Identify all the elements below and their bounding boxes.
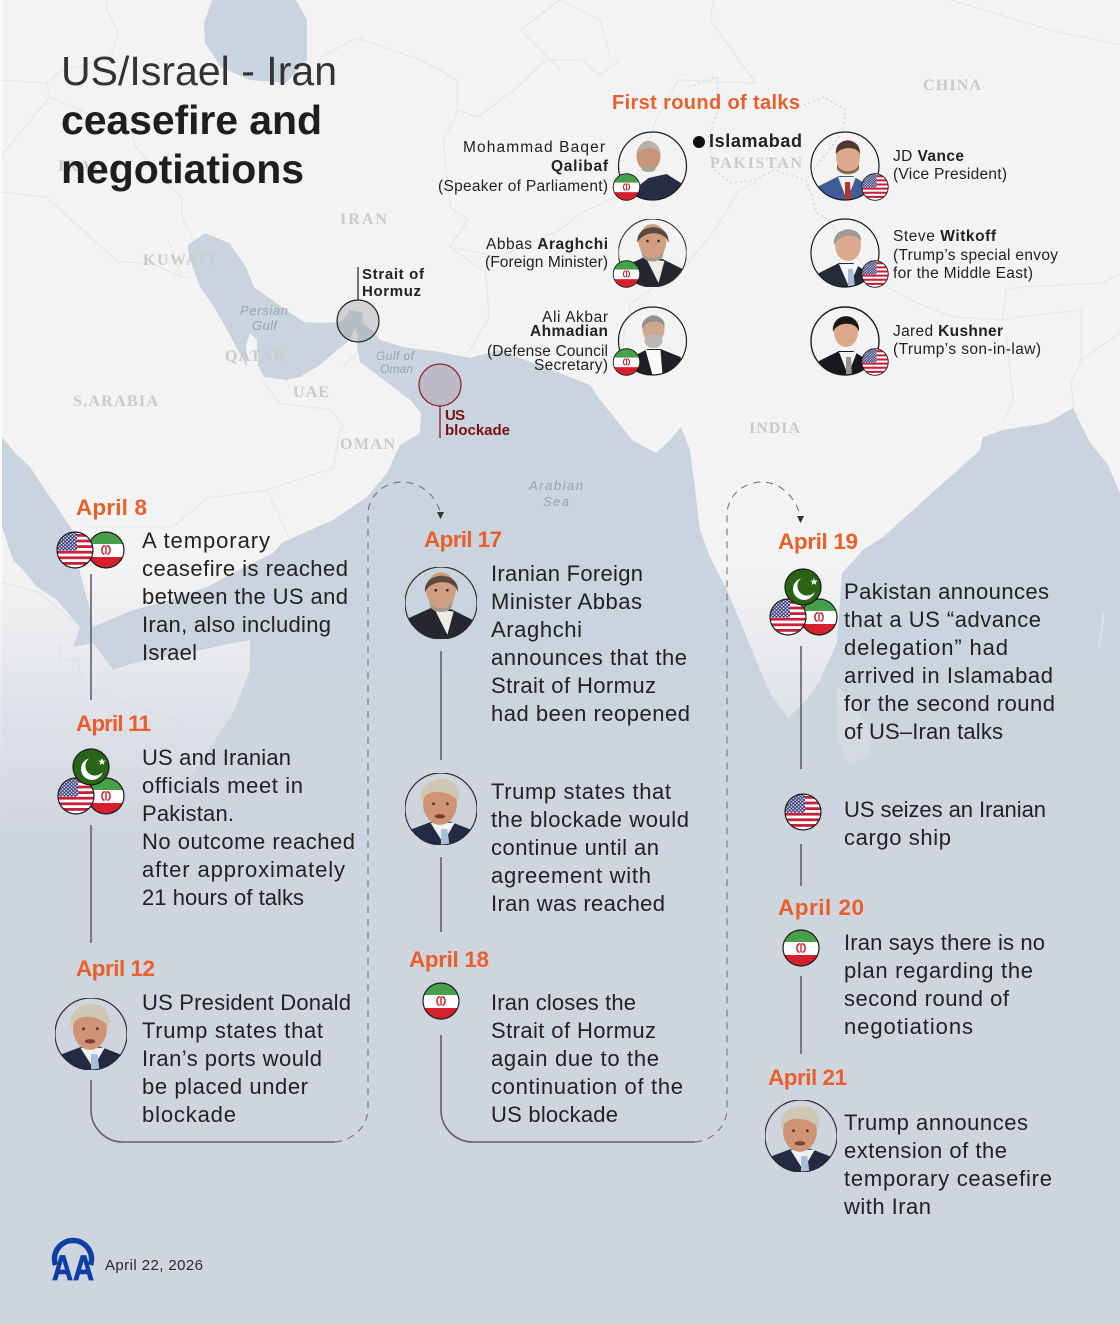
event: April 11 — [58, 711, 355, 910]
footer logo: AA: AA — [52, 1249, 94, 1288]
land: Africa horn — [2, 527, 250, 1000]
event: April 11: Pakistan. — [142, 801, 234, 826]
delegate: Vance: JD Vance — [893, 148, 964, 165]
dotted Kashmir border — [689, 77, 846, 220]
icon: Iran flag — [783, 930, 819, 966]
icon: Araghchi portrait — [405, 567, 477, 639]
event: April 18: April 18 — [409, 947, 489, 972]
sea labels — [240, 303, 583, 509]
event: April 11: US and Iranian — [142, 745, 291, 770]
icon: Trump portrait — [765, 1100, 837, 1172]
country labels: OMAN — [340, 436, 395, 453]
delegate: Araghchi: (Foreign Minister) — [485, 254, 608, 271]
event: April 18: Strait of Hormuz — [491, 1018, 656, 1043]
land: Andaman islands — [1098, 612, 1105, 648]
title — [61, 48, 337, 192]
marker: US blockade: blockade — [445, 422, 510, 439]
event: April 11: 21 hours of talks — [142, 885, 304, 910]
delegate: Vance — [811, 132, 1007, 200]
event: April 19 cargo ship — [785, 794, 1046, 850]
event: April 17 Trump: the blockade would — [491, 807, 689, 832]
event: April 21 — [765, 1065, 1052, 1219]
delegate: Qalibaf: (Speaker of Parliament) — [438, 178, 608, 195]
country labels: PAKISTAN — [710, 155, 802, 172]
connector: column 2 solid lines — [441, 651, 695, 1142]
delegate: Kushner: (Trump’s son-in-law) — [893, 341, 1041, 358]
country labels: KUWAIT — [143, 252, 217, 269]
delegate: Kushner — [811, 307, 1041, 375]
event: April 8 — [57, 495, 348, 665]
event: April 17 Araghchi: announces that the — [491, 645, 687, 670]
delegate: Vance: (Vice President) — [893, 166, 1007, 183]
delegate: Witkoff: (Trump’s special envoy — [893, 247, 1058, 264]
delegate: Ahmadian: Secretary) — [534, 357, 608, 374]
event: April 17 Araghchi: Araghchi — [491, 617, 582, 642]
event: April 17 Araghchi: had been reopened — [491, 701, 690, 726]
event: April 21: with Iran — [843, 1194, 931, 1219]
sea labels: Oman — [380, 362, 413, 376]
sea labels: Sea — [543, 494, 569, 509]
title: ceasefire and — [61, 97, 322, 143]
delegate: Qalibaf: Qalibaf — [551, 158, 609, 175]
event: April 19 Pakistan: for the second round — [844, 691, 1055, 716]
delegate: Qalibaf — [438, 132, 686, 200]
event: April 21: temporary ceasefire — [844, 1166, 1052, 1191]
event: April 11: No outcome reached — [142, 829, 355, 854]
event: April 19 cargo ship: US seizes an Iranian — [844, 797, 1046, 822]
country labels: IRAN — [340, 211, 387, 228]
delegate: Kushner: Jared Kushner — [893, 323, 1003, 340]
event: April 12: be placed under — [142, 1074, 308, 1099]
event: April 11: officials meet in — [142, 773, 303, 798]
event: April 19 Pakistan: arrived in Islamabad — [844, 663, 1053, 688]
event: April 19 cargo ship: cargo ship — [844, 825, 951, 850]
event: April 17 Araghchi: April 17 — [424, 527, 502, 552]
event: April 18: continuation of the — [491, 1074, 683, 1099]
borders — [0, 0, 1120, 775]
delegate: Qalibaf: Mohammad Baqer — [463, 139, 605, 156]
event: April 12: blockade — [142, 1102, 236, 1127]
delegate: Ahmadian: (Defense Council — [487, 343, 608, 360]
delegate: Ahmadian: Ahmadian — [530, 323, 608, 340]
bottom fade — [0, 570, 1120, 830]
event: April 12 — [55, 956, 351, 1127]
country labels: QATAR — [225, 348, 285, 365]
event: April 8: Israel — [142, 640, 197, 665]
heading: first round of talks: First round of talks — [612, 92, 800, 114]
marker: Strait of Hormuz — [337, 266, 425, 342]
marker: US blockade — [419, 364, 510, 439]
country labels — [58, 77, 981, 453]
event: April 8: A temporary — [142, 528, 270, 553]
event: April 21: Trump announces — [844, 1110, 1028, 1135]
title: negotiations — [61, 146, 304, 192]
event: April 8: Iran, also including — [142, 612, 331, 637]
sea labels: Gulf of — [376, 349, 416, 363]
event: April 17 Araghchi: Strait of Hormuz — [491, 673, 656, 698]
event: April 19 Pakistan: that a US “advance — [844, 607, 1041, 632]
event: April 19 Pakistan: Pakistan announces — [844, 579, 1049, 604]
sea labels: Persian — [240, 303, 288, 318]
event: April 20 — [778, 895, 1045, 1039]
marker: US blockade: US — [445, 407, 465, 424]
sea labels: Gulf — [252, 318, 278, 333]
event: April 17 Trump: continue until an — [491, 835, 659, 860]
event: April 21: extension of the — [844, 1138, 1007, 1163]
event: April 19 Pakistan: April 19 — [778, 529, 858, 554]
arrow: column 2 to column 3 — [695, 482, 804, 1142]
event: April 17 Araghchi: Iranian Foreign — [491, 561, 643, 586]
country labels: CHINA — [923, 77, 981, 94]
event: April 20: negotiations — [844, 1014, 973, 1039]
delegate: Witkoff: Steve Witkoff — [893, 228, 997, 245]
title: US/Israel - Iran — [61, 48, 337, 94]
icon: Iran flag — [423, 983, 459, 1019]
delegate: Araghchi — [485, 219, 686, 287]
event: April 8: April 8 — [76, 495, 147, 520]
event: April 19 Pakistan: of US–Iran talks — [844, 719, 1003, 744]
marker: Strait of Hormuz: Strait of — [362, 266, 425, 283]
Islamabad marker: Islamabad — [709, 131, 802, 151]
event: April 19 Pakistan: delegation” had — [844, 635, 1008, 660]
icon: US flag — [785, 794, 821, 830]
land: Sri Lanka — [837, 687, 873, 763]
marker: Strait of Hormuz: Hormuz — [362, 283, 421, 300]
event: April 17 Trump: Trump states that — [491, 779, 671, 804]
event: April 17 Trump: Iran was reached — [491, 891, 665, 916]
delegate: Witkoff: for the Middle East) — [893, 265, 1033, 282]
icon: Trump portrait — [405, 773, 477, 845]
event: April 12: Iran’s ports would — [142, 1046, 322, 1071]
event: April 18: Iran closes the — [491, 990, 636, 1015]
event: April 19 Pakistan — [770, 529, 1055, 744]
sea: Caspian — [204, 0, 307, 83]
icon: Trump portrait — [55, 998, 127, 1070]
event: April 8: ceasefire is reached — [142, 556, 348, 581]
event: April 17 Araghchi: Minister Abbas — [491, 589, 642, 614]
delegate: Ahmadian — [487, 307, 686, 375]
arrow: column 1 to column 2 — [335, 482, 444, 1142]
event: April 17 Trump: agreement with — [491, 863, 651, 888]
footer date: April 22, 2026 — [105, 1257, 203, 1274]
event: April 12: US President Donald — [142, 990, 351, 1015]
event: April 18: again due to the — [491, 1046, 659, 1071]
event: April 8: between the US and — [142, 584, 348, 609]
country labels: UAE — [293, 384, 329, 401]
event: April 11: after approximately — [142, 857, 345, 882]
event: April 11: April 11 — [76, 711, 151, 736]
event: April 12: Trump states that — [142, 1018, 323, 1043]
sea labels: Arabian — [528, 478, 583, 493]
delegate: Araghchi: Abbas Araghchi — [486, 236, 608, 253]
event: April 17 Araghchi — [405, 527, 690, 726]
event: April 20: April 20 — [778, 895, 864, 920]
event: April 21: April 21 — [768, 1065, 847, 1090]
event: April 17 Trump — [405, 773, 689, 916]
event: April 12: April 12 — [76, 956, 155, 981]
event: April 20: second round of — [844, 986, 1010, 1011]
event: April 20: plan regarding the — [844, 958, 1033, 983]
delegate: Ahmadian: Ali Akbar — [542, 309, 608, 326]
icon: Pakistan, US and Iran flags — [58, 749, 124, 814]
icon: Pakistan, US and Iran flags — [770, 569, 837, 635]
event: April 20: Iran says there is no — [844, 930, 1045, 955]
country labels: IRAQ — [58, 158, 105, 175]
country labels: INDIA — [749, 420, 800, 437]
connector: column 1 solid lines — [91, 574, 335, 1142]
event: April 18: US blockade — [491, 1102, 618, 1127]
delegate: Witkoff — [811, 219, 1058, 287]
event: April 18 — [409, 947, 683, 1127]
connector: column 3 solid lines — [800, 646, 802, 1054]
country labels: S.ARABIA — [73, 393, 158, 410]
icon: US and Iran flags — [57, 532, 124, 568]
